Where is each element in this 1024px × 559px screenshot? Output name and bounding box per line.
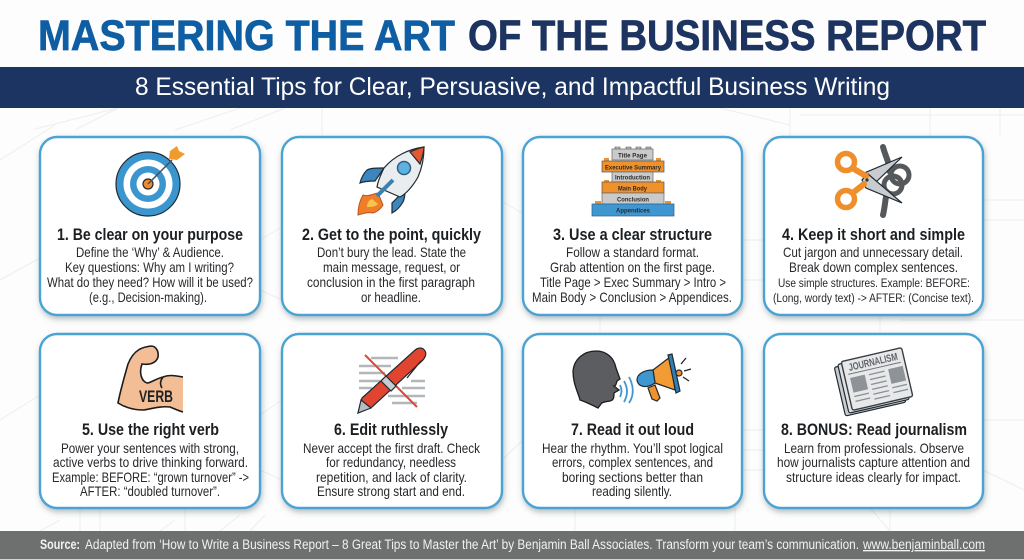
body text: active verbs to drive thinking forward. [53,455,248,470]
body text [303,441,480,499]
title: MASTERING THE ART [38,13,455,60]
body text: repetition, and lack of clarity. [316,470,467,485]
heading: 2. Get to the point, quickly [302,225,481,244]
icon: report structure blocks: Main Body [618,186,647,192]
body text: reading silently. [592,484,672,499]
icon: report structure blocks [592,147,674,216]
body text [47,245,253,305]
icon: target [116,146,185,216]
subtitle banner: 8 Essential Tips for Clear, Persuasive, and Impactful Business Writing [135,73,890,101]
source footer: www.benjaminball.com [862,537,985,552]
body text: Learn from professionals. Observe [784,441,964,456]
body text: Never accept the first draft. Check [303,441,480,456]
body text: main message, request, or [323,260,460,275]
body text: how journalists capture attention and [777,455,970,470]
body text: Grab attention on the first page. [550,260,715,275]
body text: Title Page > Exec Summary > Intro > [540,275,726,290]
body text: Use simple structures. Example: BEFORE: [778,276,970,290]
body text: Example: BEFORE: “grown turnover” -> [52,470,249,485]
source footer: Source: [40,537,80,552]
panel: tip 5 [40,334,260,508]
icon: report structure blocks: Executive Summary [605,164,661,172]
body text: for redundancy, needless [326,455,456,470]
body text: Main Body > Conclusion > Appendices. [532,290,732,305]
panel: tip 7 [523,334,742,508]
heading: 8. BONUS: Read journalism [781,420,967,439]
heading: 3. Use a clear structure [553,225,712,244]
body text: Key questions: Why am I writing? [65,260,234,275]
icon: scissors cutting knot [838,147,909,215]
icon: pen crossing out text [358,348,426,413]
body text: or headline. [361,290,421,305]
panel: tip 2 [282,137,502,315]
icon: report structure blocks: Introduction [615,174,650,182]
heading: 5. Use the right verb [82,420,219,439]
icon: newspaper: JOURNALISM [847,351,899,374]
icon: report structure blocks: Title Page [618,152,647,160]
body text: conclusion in the first paragraph [307,275,475,290]
body text: Break down complex sentences. [789,260,958,275]
heading: 7. Read it out loud [571,420,694,439]
icon: speaking head with megaphone [573,351,691,408]
panel: tip 1 [40,137,260,315]
source footer [0,531,1024,559]
body text: structure ideas clearly for impact. [786,470,961,485]
title [38,13,986,60]
body text: Power your sentences with strong, [61,441,239,456]
body text: (Long, wordy text) -> AFTER: (Concise text). [773,291,974,305]
icon: report structure blocks: Appendices [616,208,650,214]
subtitle banner [0,67,1024,108]
icon: flexed arm with VERB [118,346,183,412]
icon: flexed arm with VERB: VERB [139,387,173,406]
body text: Don’t bury the lead. State the [317,245,466,260]
body text: Define the ‘Why’ & Audience. [76,245,224,260]
body text: What do they need? How will it be used? [47,275,253,290]
body text [773,245,974,305]
icon: rocket [358,147,424,215]
body text: boring sections better than [562,470,703,485]
icon: newspaper [833,348,914,416]
icon: report structure blocks: Conclusion [617,196,649,204]
body text: AFTER: “doubled turnover”. [80,484,220,499]
heading: 4. Keep it short and simple [782,225,965,244]
body text [542,441,723,499]
body text [52,441,249,499]
heading: 1. Be clear on your purpose [57,225,243,244]
body text [777,441,970,485]
body text [532,245,732,305]
body text: Hear the rhythm. You’ll spot logical [542,441,723,456]
body text: Follow a standard format. [566,245,699,260]
body text: Cut jargon and unnecessary detail. [783,245,963,260]
panel: tip 4 [764,137,983,315]
panel: tip 8 [764,334,983,508]
heading: 6. Edit ruthlessly [334,420,448,439]
body text [307,245,475,305]
panel: tip 3 [523,137,742,315]
source footer: Adapted from ‘How to Write a Business Report – 8 Great Tips to Master the Art’ by Benjamin Ball Associates. Transform your team’s communication. [85,537,859,552]
body text: (e.g., Decision-making). [89,290,207,305]
body text: errors, complex sentences, and [552,455,713,470]
panel: tip 6 [282,334,502,508]
body text: Ensure strong start and end. [317,484,465,499]
